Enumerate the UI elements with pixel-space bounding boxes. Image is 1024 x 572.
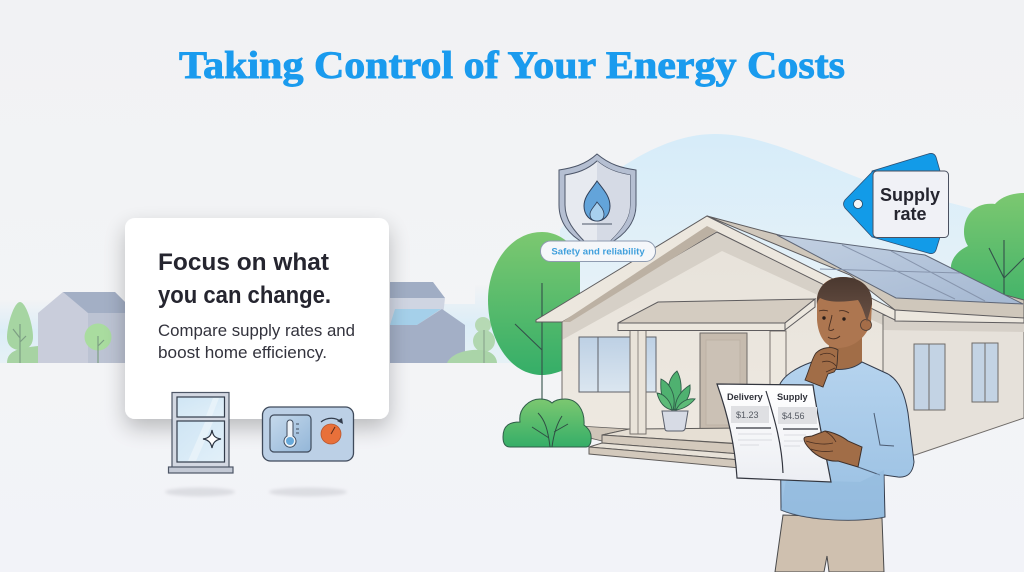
fold line	[766, 391, 783, 473]
panel heading: Focus on what	[158, 249, 329, 276]
icon: window	[165, 392, 235, 496]
solar panels	[777, 235, 1023, 304]
panel body text: boost home efficiency.	[158, 344, 327, 362]
safety and reliability label: Safety and reliability	[551, 246, 645, 258]
porch roof	[618, 299, 815, 330]
pants	[775, 515, 884, 572]
column: delivery: Delivery	[727, 392, 764, 402]
supply rate price tag: Supply	[880, 185, 940, 205]
panel: focus on what you can change	[125, 218, 389, 419]
column: delivery: $1.23	[736, 410, 759, 420]
face details	[819, 310, 849, 339]
raised arm and hand	[805, 348, 838, 387]
neck	[825, 325, 862, 370]
tree left of house	[488, 232, 580, 400]
front gable wall	[562, 232, 883, 440]
panel heading: you can change.	[158, 282, 331, 309]
ear	[860, 320, 872, 330]
bill	[717, 384, 831, 482]
column: supply: Supply	[777, 392, 809, 402]
hair	[817, 277, 872, 322]
person reviewing bill	[717, 277, 914, 572]
left background neighbourhood	[0, 292, 125, 363]
porch steps	[562, 425, 745, 468]
porch posts	[630, 330, 786, 441]
column: supply: $4.56	[782, 411, 805, 421]
sweater	[780, 362, 914, 520]
tree right of house	[951, 193, 1024, 330]
door	[700, 333, 747, 430]
panel body text: Compare supply rates and	[158, 322, 355, 340]
left window	[579, 337, 656, 392]
right windows	[914, 343, 998, 410]
supply rate price tag	[844, 153, 948, 254]
lower hand	[804, 431, 862, 467]
icon: bush	[503, 399, 591, 447]
safety and reliability label	[540, 241, 656, 262]
right background neighbourhood	[390, 282, 520, 363]
gable fascia	[536, 216, 895, 322]
roof fascia right	[895, 310, 1024, 323]
supply rate price tag: rate	[893, 204, 927, 224]
icon: gas safety shield	[559, 154, 636, 243]
icon: thermostat	[262, 407, 354, 496]
icon: potted plant	[657, 371, 695, 431]
column: delivery	[727, 392, 772, 445]
house right wing	[883, 316, 1024, 455]
house	[536, 216, 1024, 468]
title: Taking Control of Your Energy Costs	[179, 44, 845, 87]
head	[817, 277, 872, 348]
roof plane	[707, 216, 1024, 322]
column: supply	[777, 392, 818, 446]
right sky blob	[560, 134, 1024, 330]
